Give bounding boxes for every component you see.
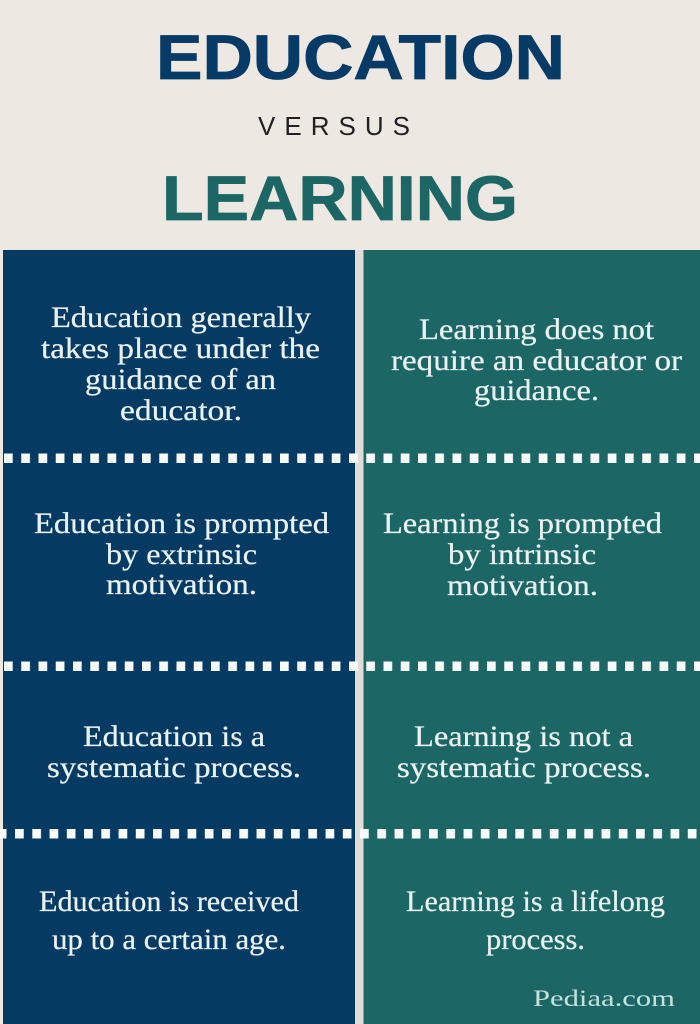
divider: row 2 — [0, 662, 700, 671]
education text: motivation — [34, 507, 329, 601]
learning text: motivation: motivation. — [447, 569, 598, 602]
education text: age: Education is received — [39, 885, 299, 918]
learning text: process: Learning is not a — [414, 720, 633, 753]
education text: process: Education is a — [83, 720, 265, 753]
learning text: guidance: require an educator or — [391, 344, 682, 377]
education text: guidance — [41, 301, 320, 427]
watermark: Pediaa.com — [533, 986, 675, 1011]
divider: row 1 — [0, 454, 700, 463]
education text: process — [47, 720, 301, 784]
education text: age: up to a certain age. — [52, 923, 286, 956]
title: Learning: LEARNING — [162, 164, 518, 234]
learning text: lifelong — [406, 885, 665, 956]
education text: guidance: educator. — [120, 394, 242, 427]
title: Education: EDUCATION — [156, 23, 565, 93]
education text: motivation: Education is prompted — [34, 507, 329, 540]
learning text: motivation: by intrinsic — [448, 538, 596, 571]
education text: guidance: takes place under the — [41, 332, 320, 365]
panel: education column — [3, 250, 355, 1024]
learning text: motivation — [383, 507, 662, 602]
learning text: guidance: guidance. — [474, 374, 599, 407]
learning text: lifelong: Learning is a lifelong — [406, 885, 665, 918]
subtitle: versus: VERSUS — [258, 111, 410, 141]
education text: motivation: motivation. — [106, 568, 257, 601]
learning text: lifelong: process. — [486, 923, 585, 956]
learning text: process — [397, 720, 651, 784]
education text: guidance: Education generally — [51, 301, 311, 334]
panel: learning column — [364, 250, 700, 1024]
education text: age — [39, 885, 299, 956]
learning text: guidance: Learning does not — [419, 313, 655, 346]
education text: process: systematic process. — [47, 751, 301, 784]
learning text: motivation: Learning is prompted — [383, 507, 662, 540]
learning text: guidance — [391, 313, 682, 407]
gutter — [355, 250, 364, 1024]
divider: row 3 — [0, 829, 700, 838]
education text: guidance: guidance of an — [85, 363, 276, 396]
education text: motivation: by extrinsic — [106, 538, 257, 571]
learning text: process: systematic process. — [397, 751, 651, 784]
